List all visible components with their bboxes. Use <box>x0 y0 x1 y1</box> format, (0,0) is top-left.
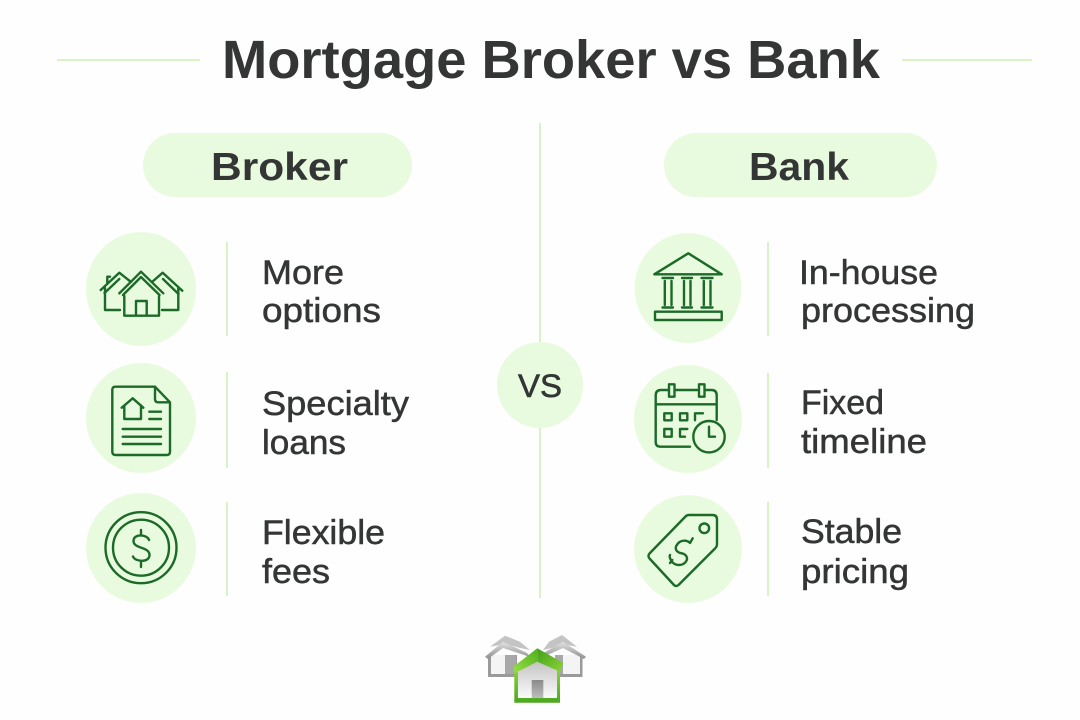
vs badge <box>497 342 583 428</box>
icon: dollar coin <box>86 493 196 603</box>
right gray house <box>543 635 586 677</box>
title: Mortgage Broker vs Bank <box>222 30 881 90</box>
icon: calendar and clock <box>634 365 742 473</box>
panel: broker <box>86 133 412 603</box>
icon: houses <box>86 232 196 346</box>
text: stable pricing <box>801 513 909 591</box>
text: fixed timeline: Fixed <box>801 384 884 422</box>
text: stable pricing: Stable <box>801 513 902 551</box>
text: in-house processing <box>799 254 975 330</box>
text: flexible fees <box>262 514 385 591</box>
text: in-house processing: processing <box>801 292 975 330</box>
left gray house <box>485 636 530 677</box>
text: more options <box>262 254 381 330</box>
green center house <box>513 648 563 703</box>
text: more options: More <box>262 254 344 292</box>
icon: loan document <box>86 363 196 473</box>
panel: bank <box>634 133 975 603</box>
text: stable pricing: pricing <box>801 553 909 591</box>
heading: broker <box>143 133 412 197</box>
icon: house logo <box>485 635 586 703</box>
text: specialty loans: loans <box>262 424 346 462</box>
text: fixed timeline <box>801 384 927 461</box>
text: specialty loans: Specialty <box>262 385 409 423</box>
text: flexible fees: fees <box>262 553 330 591</box>
text: specialty loans <box>262 385 409 462</box>
heading: broker: Broker <box>211 146 348 189</box>
icon: price tag <box>634 495 742 603</box>
text: flexible fees: Flexible <box>262 514 385 552</box>
vs badge: VS <box>518 368 562 404</box>
icon: bank building <box>634 233 742 343</box>
text: fixed timeline: timeline <box>801 423 927 461</box>
heading: bank: Bank <box>749 146 849 189</box>
heading: bank <box>664 133 937 197</box>
text: in-house processing: In-house <box>799 254 938 292</box>
text: more options: options <box>262 292 381 330</box>
